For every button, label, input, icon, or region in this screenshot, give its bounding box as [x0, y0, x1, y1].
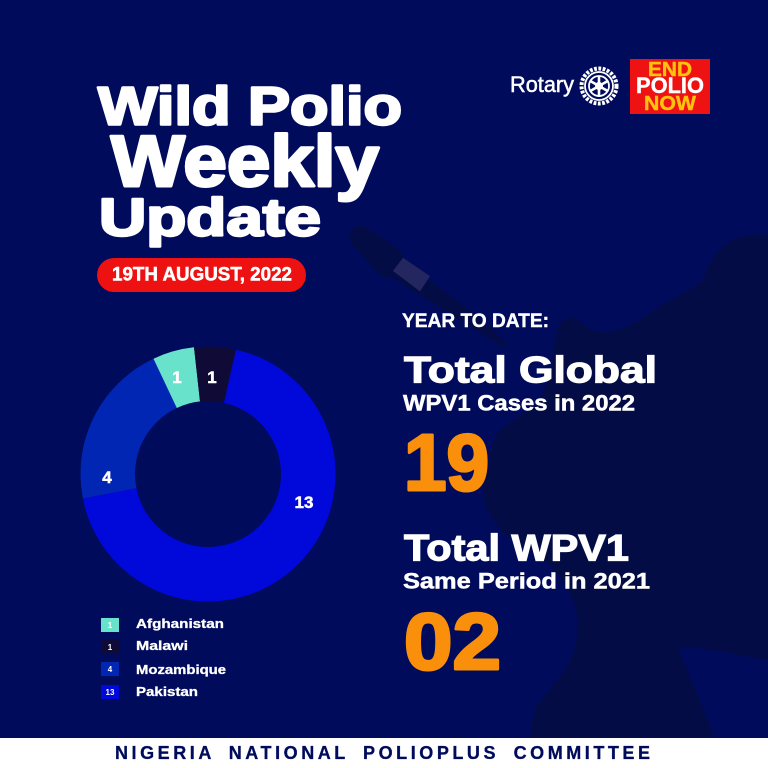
heading: Total Global	[404, 350, 657, 390]
legend: Mozambique: 4	[108, 665, 113, 674]
logo: End Polio Now	[630, 59, 710, 115]
logo: End Polio Now: NOW	[644, 93, 696, 115]
number 02: 02	[404, 597, 501, 686]
date badge	[97, 258, 306, 292]
slice: Pakistan 13	[83, 350, 336, 602]
title	[98, 76, 402, 248]
legend: Mozambique	[101, 662, 226, 677]
logo: End Polio Now: END	[648, 59, 692, 81]
legend: Malawi	[101, 638, 188, 654]
legend	[101, 616, 226, 699]
slice: Malawi 1	[194, 347, 236, 403]
slice labels: 13	[295, 493, 313, 512]
slice labels: 4	[102, 468, 112, 487]
legend: Malawi: Malawi	[136, 638, 188, 653]
year to date label: YEAR TO DATE:	[402, 311, 549, 332]
legend: Malawi: 1	[108, 643, 113, 652]
legend: Afghanistan	[101, 616, 224, 632]
title: Weekly	[111, 122, 379, 202]
subheading: WPV1 Cases in 2022	[403, 390, 635, 416]
legend: Mozambique: Mozambique	[136, 662, 226, 677]
slice labels	[102, 368, 313, 512]
heading: Total WPV1	[404, 528, 629, 568]
subheading: Same Period in 2021	[403, 568, 650, 594]
slice: Mozambique 4	[81, 359, 177, 498]
logo: Rotary wordmark: Rotary	[510, 72, 574, 97]
legend: Pakistan: 13	[106, 688, 115, 697]
number 19: 19	[404, 418, 489, 507]
icon: Rotary wheel	[582, 68, 616, 104]
slice: Afghanistan 1	[154, 347, 200, 408]
logo: End Polio Now: POLIO	[636, 73, 704, 98]
legend: Afghanistan: 1	[108, 621, 113, 630]
date badge: 19TH AUGUST, 2022	[112, 264, 292, 286]
donut chart	[81, 347, 336, 602]
logos	[510, 59, 710, 115]
legend: Afghanistan: Afghanistan	[136, 616, 224, 631]
background silhouette	[349, 225, 768, 747]
stat: total 2021	[403, 528, 650, 686]
footer: NIGERIA NATIONAL POLIOPLUS COMMITTEE	[115, 743, 650, 763]
stat: total global	[403, 350, 657, 507]
title: Wild Polio	[98, 76, 402, 136]
slice labels: 1	[207, 368, 217, 387]
legend: Pakistan	[101, 684, 198, 699]
footer	[0, 738, 768, 768]
legend: Pakistan: Pakistan	[136, 684, 198, 699]
title: Update	[99, 188, 321, 248]
slice labels: 1	[172, 368, 182, 387]
